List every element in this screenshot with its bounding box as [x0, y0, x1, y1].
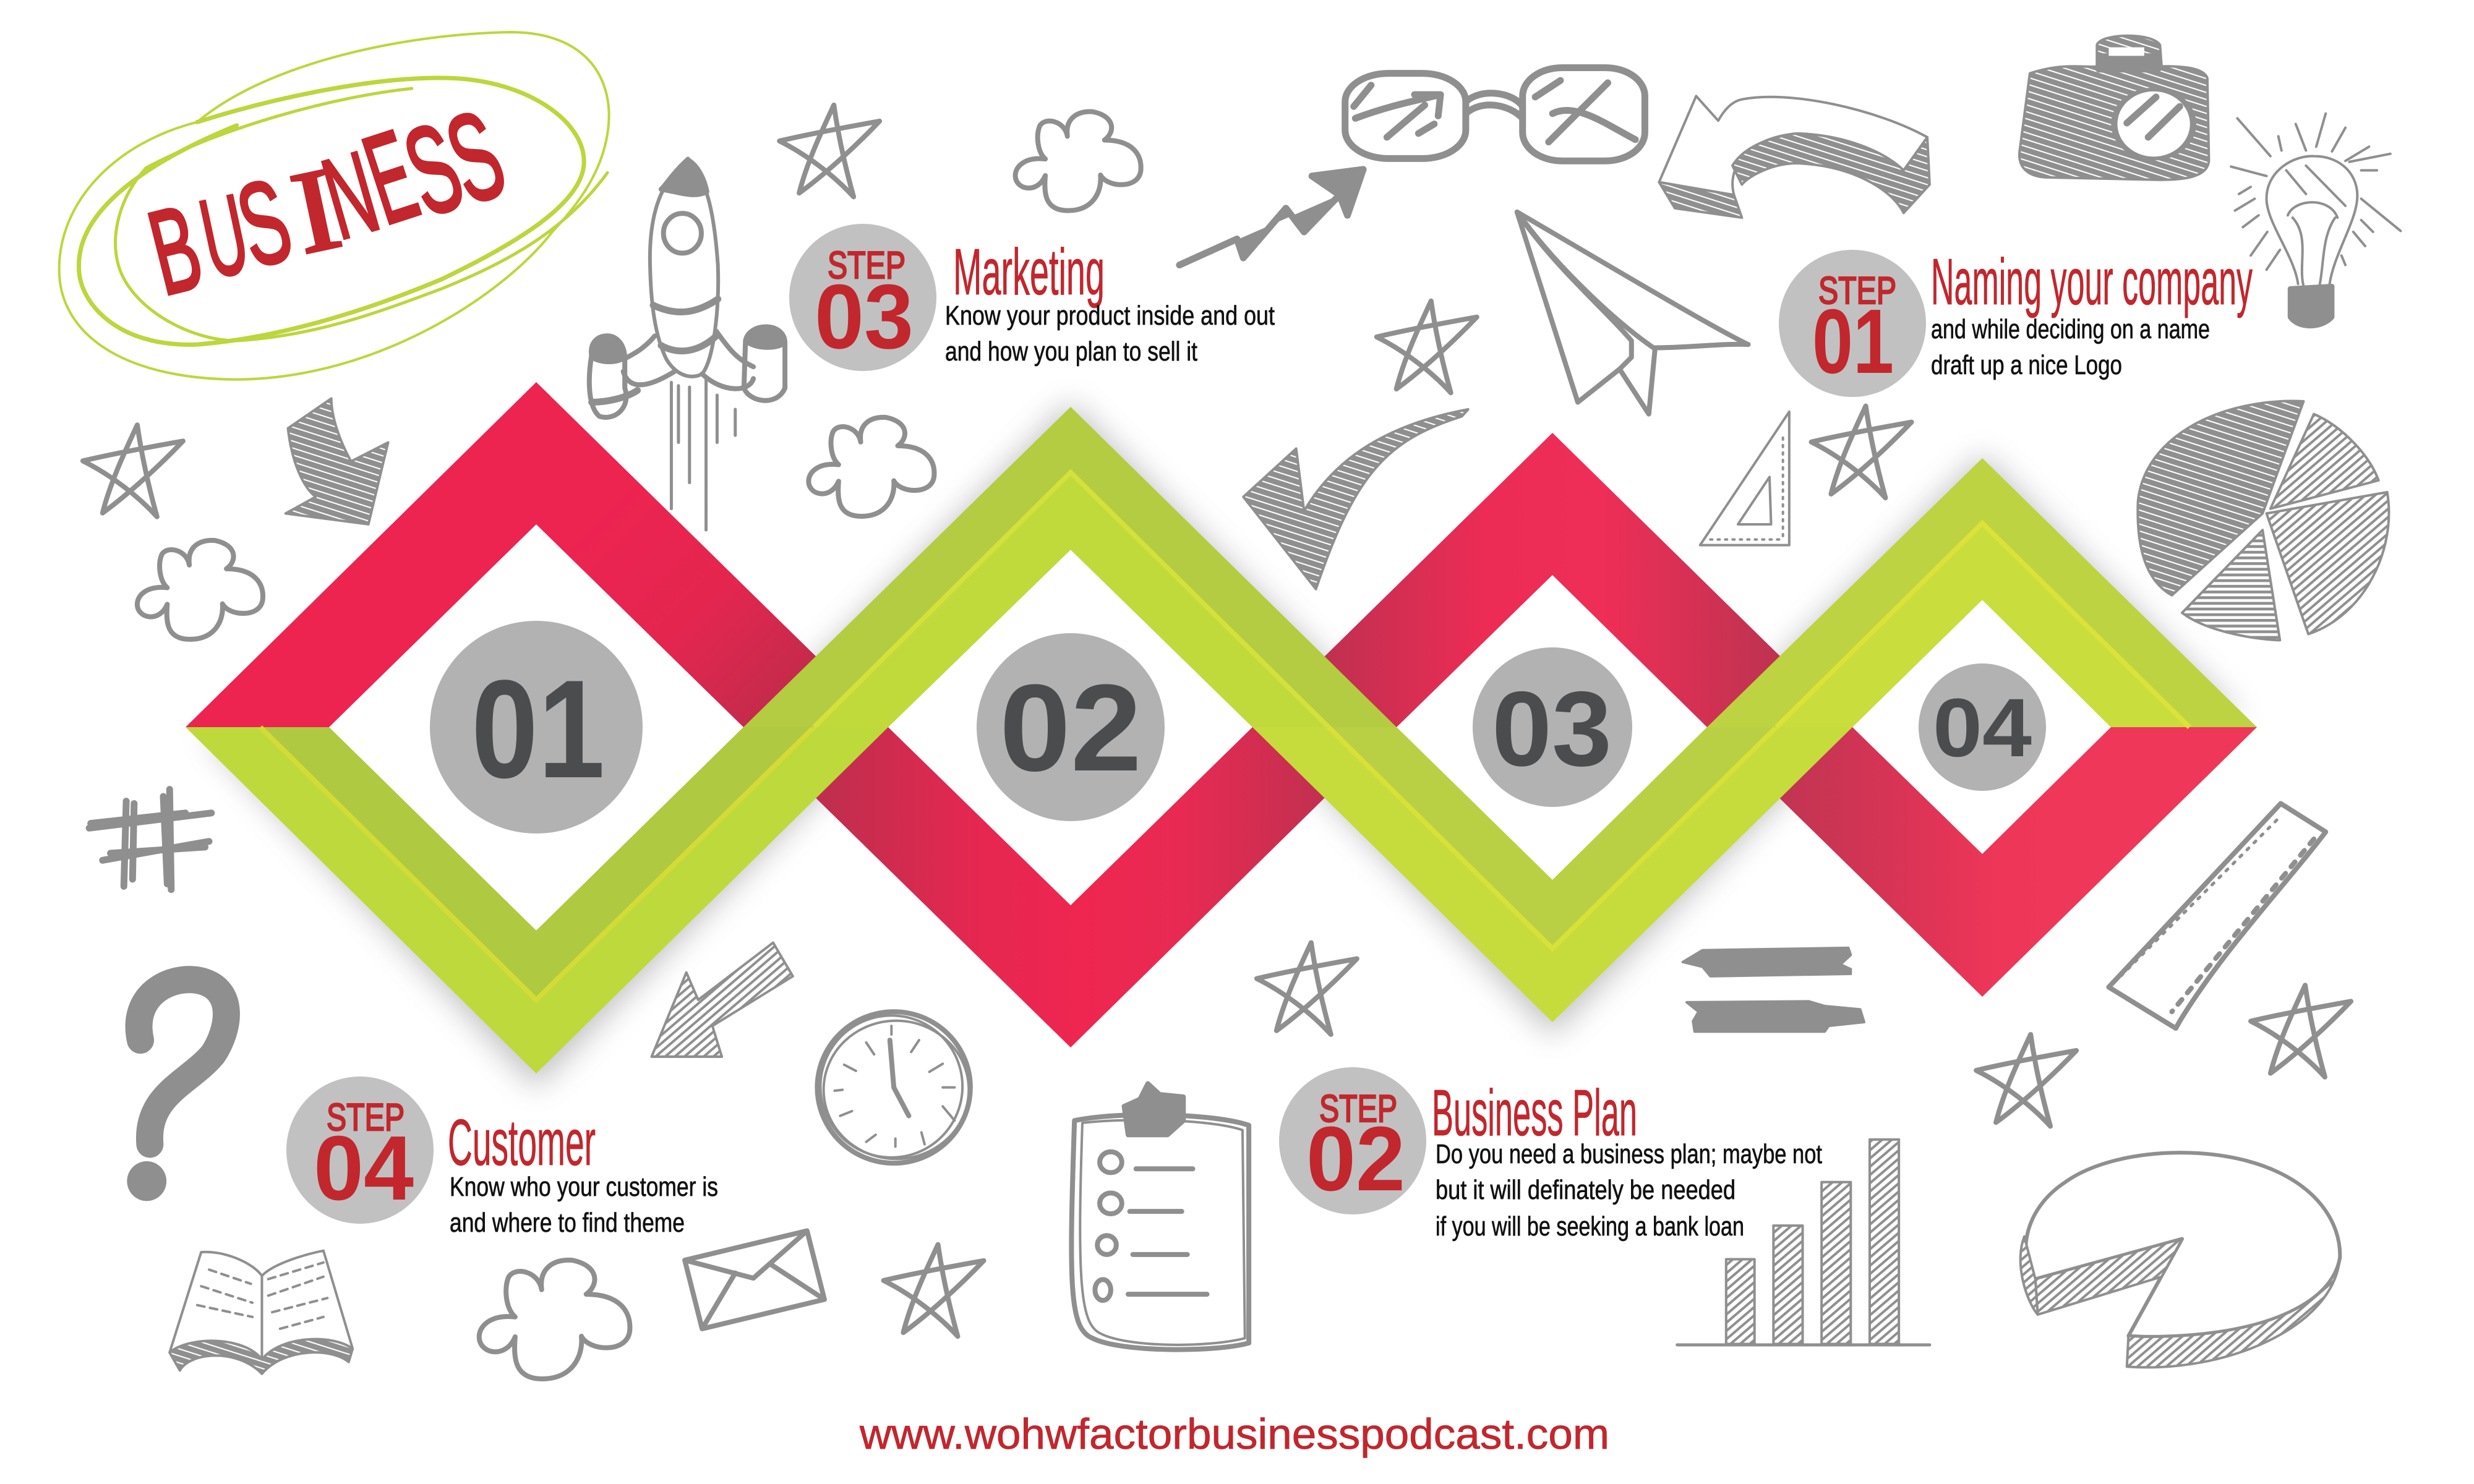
green scribble ellipse	[59, 32, 609, 380]
sketch icons: top right quadrant	[1179, 36, 2400, 640]
body text	[945, 301, 1275, 367]
green ribbon: diamond 3 bottom	[1252, 727, 1852, 1022]
icon: glasses	[1345, 67, 1645, 161]
icon: star	[884, 1245, 984, 1336]
body text: and while deciding on a name	[1931, 314, 2210, 344]
icon: envelope	[685, 1231, 824, 1329]
red ribbon: diamond 2 bottom	[743, 727, 1397, 1047]
icon: light bulb	[2231, 114, 2400, 326]
white diamond interiors	[329, 524, 2111, 931]
icon: small arrow pointing down-left	[652, 942, 793, 1057]
step 03 block: marketing	[789, 224, 1275, 371]
step 02 block: business plan	[1279, 1067, 1822, 1242]
red ribbon: diamond 1 top	[186, 382, 888, 727]
icon: cloud	[808, 417, 934, 516]
icon: question mark	[127, 979, 226, 1201]
icon: star	[1377, 301, 1477, 393]
heading: Marketing	[953, 236, 1105, 309]
body text: draft up a nice Logo	[1931, 350, 2122, 380]
step number: 01	[1812, 291, 1894, 393]
step 04 block: customer	[286, 1077, 718, 1238]
title text: B	[137, 180, 213, 321]
badge circle	[1279, 1067, 1426, 1214]
heading: Customer	[448, 1106, 596, 1179]
icon: open book	[169, 1251, 353, 1374]
title text: E	[349, 104, 432, 251]
number badge 03	[1473, 647, 1632, 807]
icon: rising arrow	[1179, 169, 1363, 265]
icon: star	[2251, 985, 2351, 1077]
icon: hatched bar chart	[1677, 1140, 1930, 1345]
number badge 02	[977, 633, 1165, 821]
icon: clock	[817, 1012, 970, 1163]
body text: and where to find theme	[450, 1208, 685, 1238]
step number: 03	[815, 266, 914, 368]
icon: clipboard checklist	[1071, 1084, 1249, 1350]
green ribbon: diamond 2 top	[743, 407, 1397, 727]
step number: 02	[1306, 1108, 1405, 1210]
business title with green scribble	[59, 32, 609, 380]
title text: I	[281, 143, 351, 279]
badge circle	[789, 224, 936, 371]
icon: cloud	[1016, 111, 1141, 211]
step label: STEP	[828, 244, 905, 287]
soft shadows of the green ribbon	[204, 402, 2242, 1088]
title text	[137, 85, 521, 321]
icon: check mark	[1243, 409, 1468, 589]
step label: STEP	[1319, 1088, 1397, 1130]
step label: STEP	[1818, 270, 1896, 312]
icon: star	[1976, 1034, 2076, 1126]
step 02 block: business plan: Business Plan	[1432, 1077, 1637, 1149]
green ribbon: diamond 1 bottom	[186, 727, 888, 1073]
body text: and how you plan to sell it	[945, 336, 1197, 367]
red ribbon: diamond 4 bottom	[1707, 727, 2257, 997]
body text: Do you need a business plan; maybe not	[1436, 1139, 1822, 1169]
icon: cloud	[137, 540, 263, 639]
step 01 block: naming your company	[1779, 245, 2253, 397]
step label: STEP	[327, 1096, 404, 1139]
body text: Know who your customer is	[450, 1172, 718, 1202]
number badge 02: 02	[999, 659, 1142, 797]
website url: www.wohwfactorbusinesspodcast.com	[859, 1410, 1609, 1458]
number badge 04: 04	[1933, 682, 2032, 774]
icon: rocket	[589, 158, 785, 530]
title text: S	[388, 97, 479, 243]
sketch icons: bottom right quadrant	[1257, 803, 2351, 1367]
icon: star	[1812, 406, 1912, 498]
icon: star	[779, 105, 880, 197]
number badge 01: 01	[471, 650, 605, 807]
red ribbon: diamond 3 top	[1252, 433, 1852, 727]
step number: 04	[314, 1117, 414, 1219]
icon: hatched arrow pointing down-left	[286, 398, 388, 524]
title text: U	[190, 170, 258, 302]
title text: S	[224, 153, 304, 292]
body text	[1436, 1139, 1822, 1242]
green ribbon: diamond 4 top	[1707, 458, 2257, 727]
sketch icons: top left quadrant	[83, 105, 1141, 639]
icon: star	[83, 425, 183, 517]
sketch icons: bottom left quadrant	[89, 790, 1249, 1379]
body text: but it will definately be needed	[1436, 1175, 1736, 1205]
zigzag ribbon diagram	[186, 382, 2257, 1073]
body text	[1931, 314, 2210, 380]
body text: Know your product inside and out	[945, 301, 1275, 331]
icon: camera	[2019, 36, 2209, 180]
icon: ruler	[2108, 803, 2326, 1028]
icon: curved 3D arrow	[1659, 96, 1930, 218]
number badge 01	[430, 621, 643, 834]
title text: S	[430, 85, 521, 231]
body text	[450, 1172, 718, 1238]
icon: hatched pie chart	[2138, 401, 2389, 640]
badge circle	[1779, 250, 1926, 397]
body text: if you will be seeking a bank loan	[1436, 1211, 1744, 1242]
number badge 03: 03	[1492, 670, 1612, 788]
icon: star	[1257, 942, 1357, 1034]
icon: triangle ruler	[1700, 412, 1789, 545]
icon: 3D pie chart	[2021, 1153, 2340, 1367]
icon: hash sign	[89, 790, 212, 890]
icon: paper plane	[1517, 212, 1748, 414]
badge circle	[286, 1077, 434, 1224]
icon: scribbled bars	[1683, 948, 1864, 1031]
number badge 04	[1919, 663, 2046, 791]
title text: N	[310, 127, 390, 263]
icon: cloud	[479, 1260, 630, 1379]
